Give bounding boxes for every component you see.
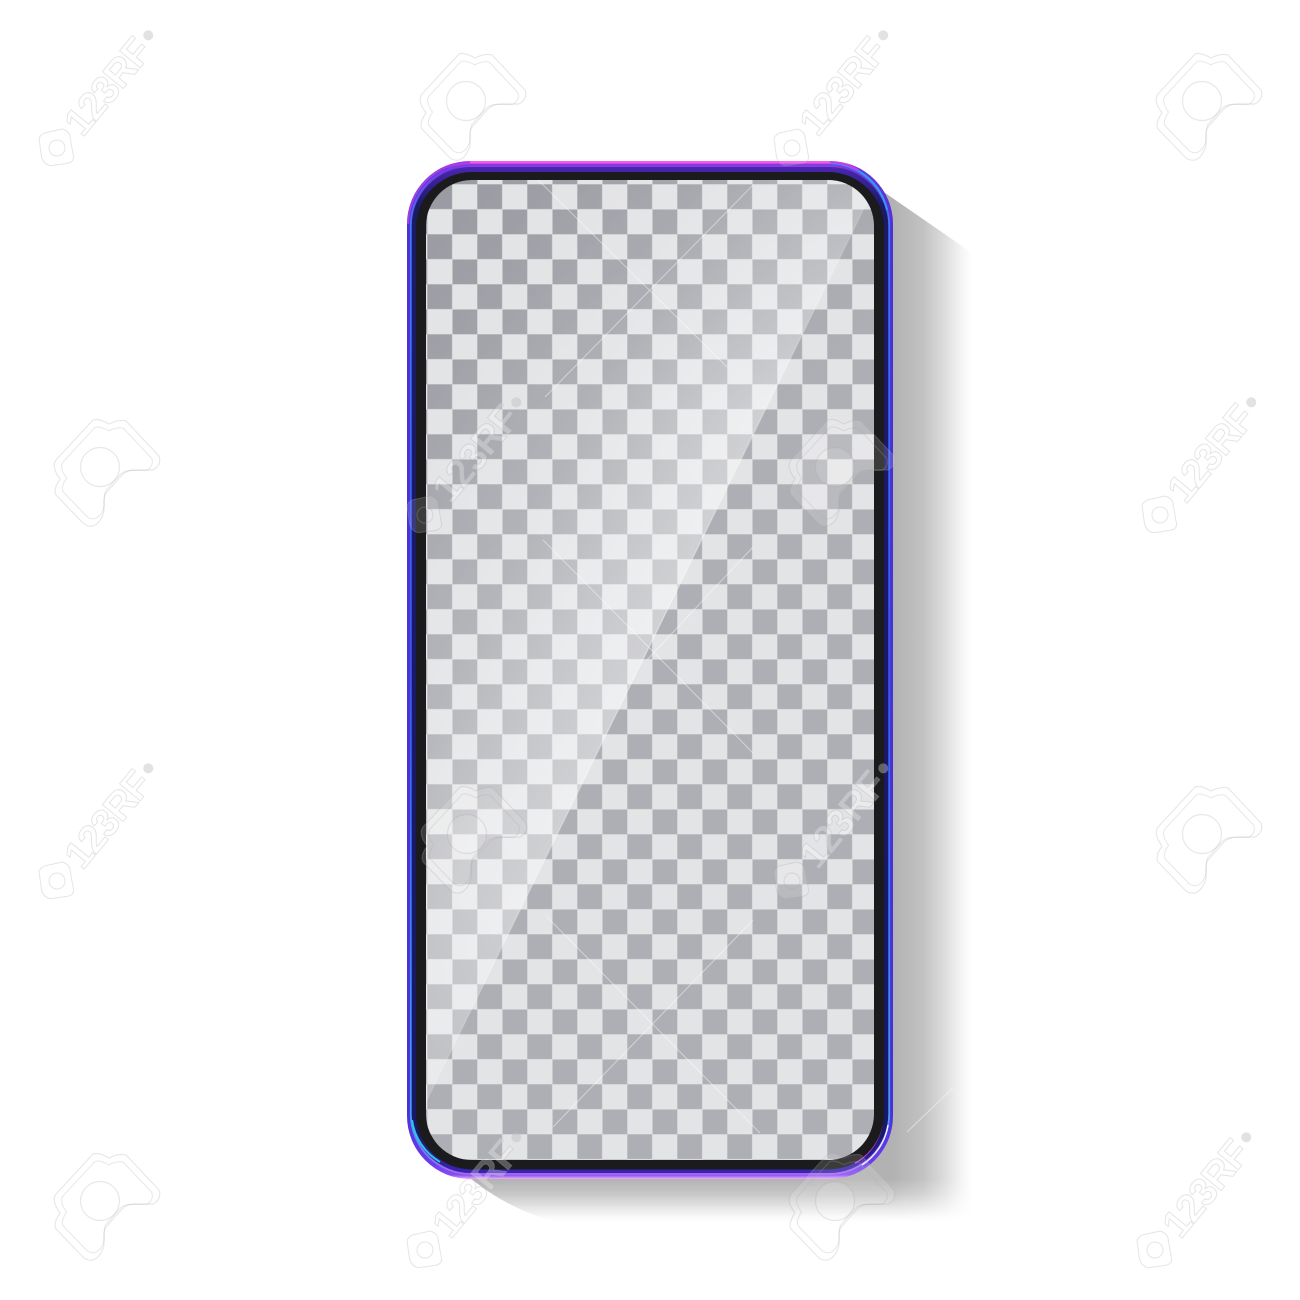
logo watermark xyxy=(1132,386,1273,544)
logo watermark: 123RF xyxy=(424,397,529,511)
logo watermark xyxy=(1127,1121,1268,1279)
logo watermark: 123RF xyxy=(424,1132,529,1246)
shadow highlight line xyxy=(907,1088,953,1132)
stamp watermark xyxy=(54,1154,160,1260)
black bezel xyxy=(416,172,884,1170)
smartphone xyxy=(407,161,893,1179)
logo watermark xyxy=(764,752,905,910)
logo watermark xyxy=(29,19,170,177)
diagonal glass glare xyxy=(426,180,878,1102)
transparent-checker screen xyxy=(426,172,878,1160)
watermark: row 2 xyxy=(54,386,1273,544)
logo watermark xyxy=(397,1121,538,1279)
stamp watermark xyxy=(54,420,160,526)
iridescent metal frame xyxy=(407,161,893,1179)
glare highlight edge xyxy=(426,180,878,1102)
logo watermark: 123RF xyxy=(1154,1132,1259,1246)
logo watermark: 123RF xyxy=(56,763,161,877)
logo watermark: 123RF xyxy=(791,763,896,877)
thin diagonal light lines xyxy=(530,172,760,1133)
logo watermark: 123RF xyxy=(1159,397,1264,511)
stamp watermark xyxy=(420,54,526,160)
logo watermark xyxy=(764,19,905,177)
watermark: row 1 xyxy=(29,19,1262,177)
watermark: row 4 xyxy=(54,1121,1268,1279)
logo watermark xyxy=(397,386,538,544)
stamp watermark xyxy=(789,1154,895,1260)
stamp watermark xyxy=(421,786,527,893)
logo watermark: 123RF xyxy=(791,30,896,144)
logo watermark xyxy=(29,752,170,910)
stamp watermark xyxy=(1156,786,1262,893)
stamp watermark xyxy=(1156,54,1262,160)
logo watermark: 123RF xyxy=(56,30,161,144)
stamp watermark xyxy=(789,420,895,526)
phone drop shadow xyxy=(472,192,964,1216)
watermark: row 3 xyxy=(29,752,1262,910)
